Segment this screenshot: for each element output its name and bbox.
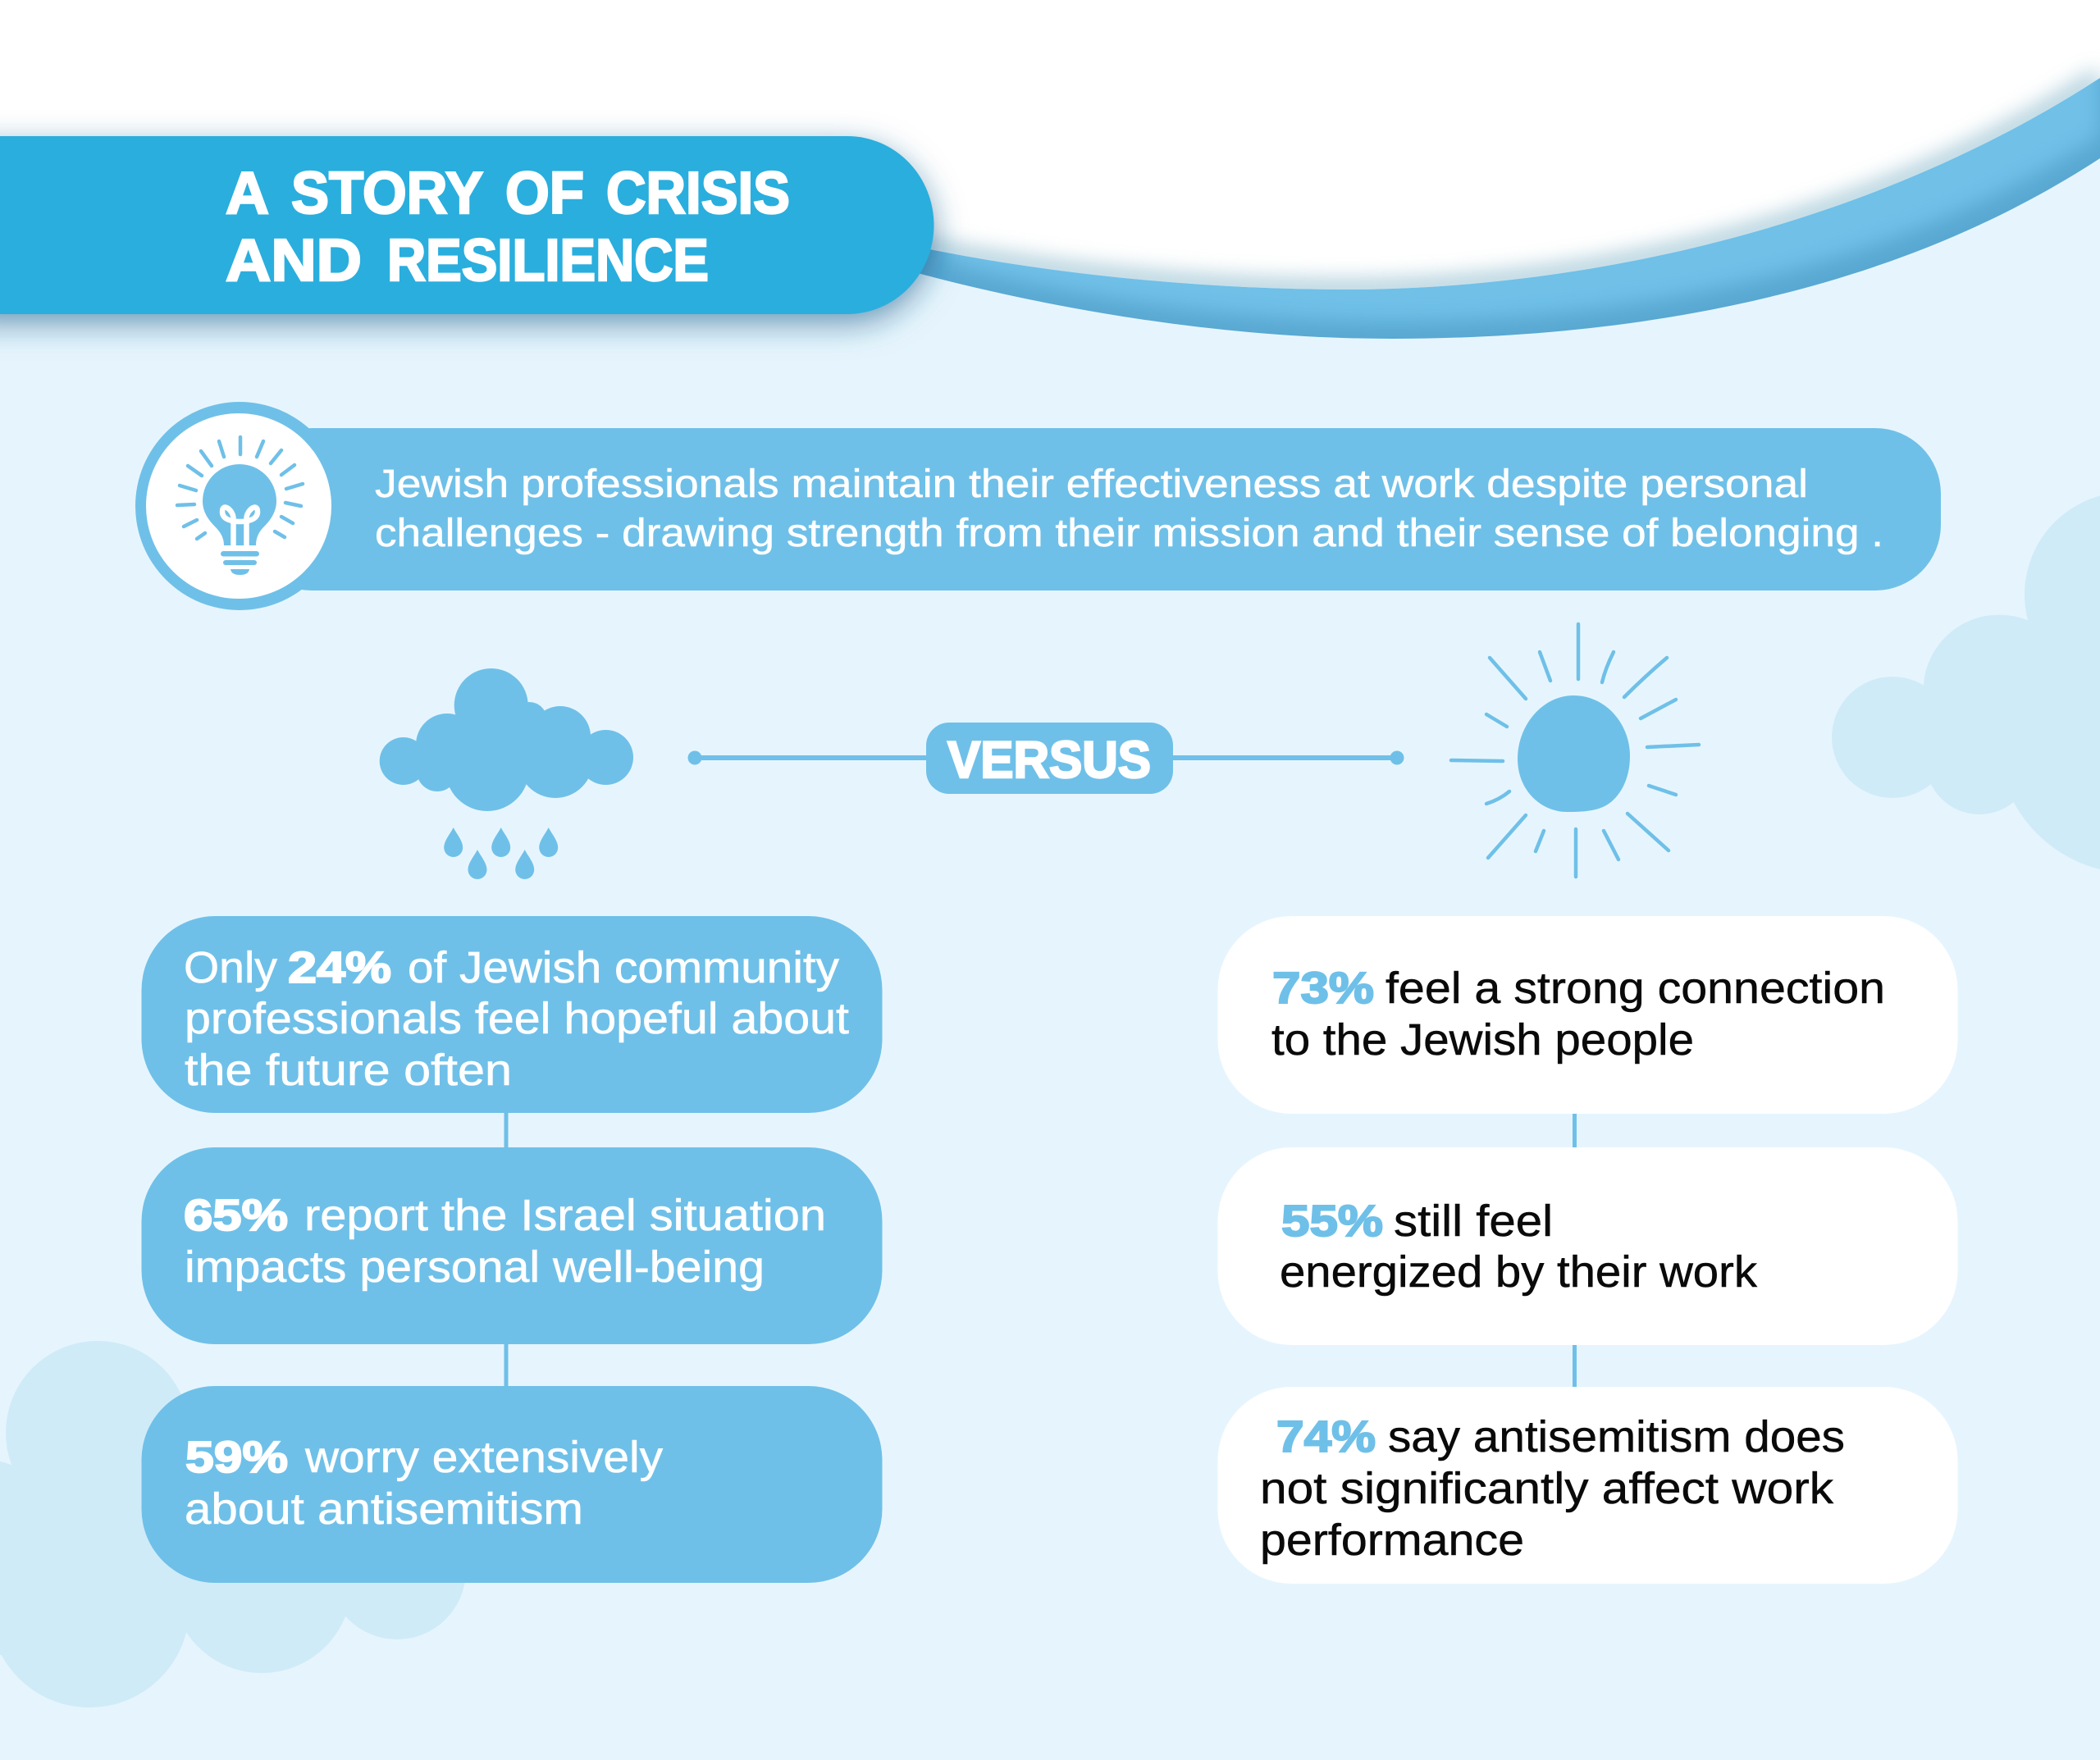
title banner: AND — [226, 228, 362, 294]
title banner: OF — [505, 161, 584, 226]
panel: 24% hopeful: 24% — [288, 943, 391, 992]
decorative cloud: right — [1832, 492, 2100, 873]
icon: rain cloud — [380, 668, 633, 879]
title banner: CRISIS — [606, 161, 790, 226]
panel: 24% hopeful — [141, 916, 883, 1113]
panel: 74% antisemitism — [1217, 1387, 1957, 1584]
panel: 65% Israel situation — [141, 1147, 883, 1344]
title banner: STORY — [291, 161, 483, 226]
panel: 73% connection: 73% — [1272, 964, 1374, 1013]
panel: 55% energized: 55% — [1281, 1197, 1383, 1246]
panel: key finding — [246, 428, 1941, 590]
title banner: RESILIENCE — [387, 228, 709, 294]
panel: 65% Israel situation: impacts personal well-being — [185, 1242, 765, 1292]
panel: 59% worry — [141, 1386, 883, 1583]
left column connectors — [504, 1107, 509, 1394]
panel: 59% worry: about antisemitism — [185, 1484, 583, 1534]
decorative cloud: bottom left — [0, 1341, 466, 1708]
swoosh band — [920, 78, 2100, 339]
icon: sun — [1451, 624, 1699, 877]
panel: 74% antisemitism: say antisemitism does — [1388, 1412, 1845, 1461]
panel: 24% hopeful: Only — [184, 943, 277, 992]
icon: light bulb — [135, 402, 344, 610]
panel: 24% hopeful: of Jewish community — [408, 943, 839, 992]
title banner: A — [226, 161, 269, 226]
right column connectors — [1573, 1107, 1577, 1394]
panel: 59% worry: 59% — [185, 1433, 288, 1482]
panel: 55% energized: still feel — [1394, 1197, 1553, 1246]
panel: 74% antisemitism: 74% — [1276, 1412, 1376, 1461]
panel: 74% antisemitism: performance — [1260, 1516, 1524, 1565]
panel: key finding: challenges - drawing strength from their mission and their sense of belonging . — [375, 512, 1883, 555]
versus connector: VERSUS — [947, 732, 1151, 789]
white top area — [0, 0, 2100, 290]
panel: 55% energized: energized by their work — [1280, 1247, 1758, 1297]
title banner — [0, 136, 934, 314]
panel: 55% energized — [1217, 1147, 1957, 1345]
panel: 65% Israel situation: 65% — [184, 1191, 288, 1240]
versus connector — [687, 723, 1404, 794]
panel: 74% antisemitism: not significantly affect work — [1260, 1464, 1834, 1513]
panel: 65% Israel situation: report the Israel situation — [304, 1191, 826, 1240]
panel: 73% connection: feel a strong connection — [1386, 964, 1885, 1013]
panel: 59% worry: worry extensively — [304, 1433, 663, 1482]
panel: 73% connection: to the Jewish people — [1271, 1015, 1694, 1065]
panel: 24% hopeful: professionals feel hopeful about — [185, 994, 849, 1043]
panel: 73% connection — [1217, 916, 1957, 1114]
panel: 24% hopeful: the future often — [185, 1046, 512, 1095]
panel: key finding: Jewish professionals maintain their effectiveness at work despite personal — [375, 463, 1808, 506]
